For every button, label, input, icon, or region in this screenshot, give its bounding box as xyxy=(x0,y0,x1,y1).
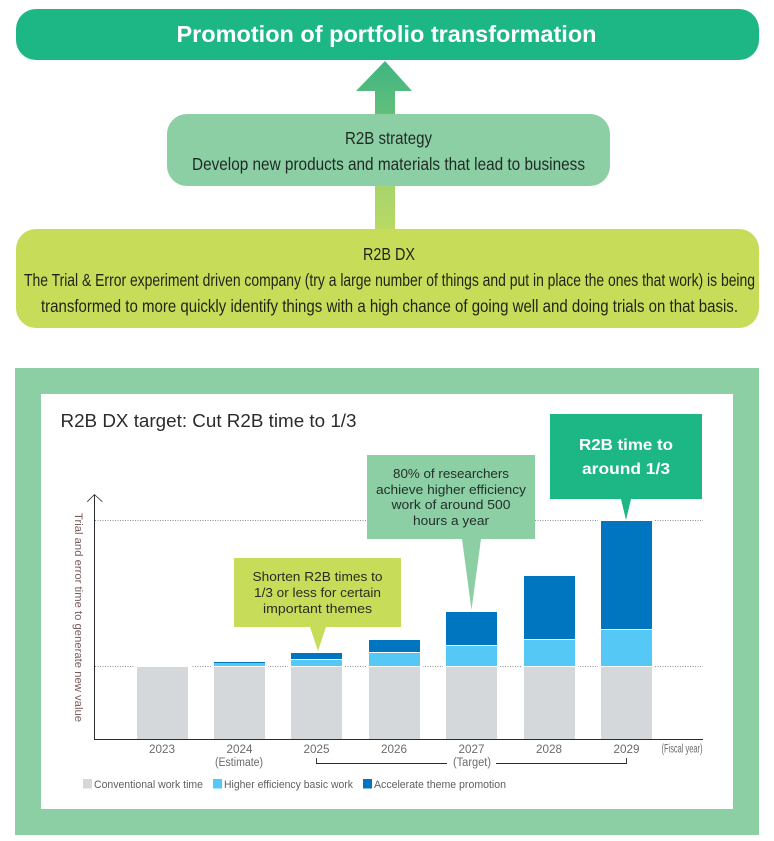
x-axis labels: (Estimate) xyxy=(215,757,263,769)
x-axis labels: 2024 xyxy=(226,744,253,756)
bars: higher efficiency basic work xyxy=(214,630,652,666)
x-axis labels: 2023 xyxy=(149,744,175,756)
x-axis labels: 2025 xyxy=(304,744,330,756)
chart title: R2B DX target: Cut R2B time to 1/3 xyxy=(60,411,356,431)
arrow: upward to portfolio transformation xyxy=(356,61,412,229)
x-axis labels: 2026 xyxy=(381,744,407,756)
heading: Promotion of portfolio transformation xyxy=(16,9,759,60)
panel: R2B strategy: R2B strategy xyxy=(345,128,432,148)
panel: R2B strategy xyxy=(167,114,610,186)
callout: shorten R2B times: Shorten R2B times to xyxy=(252,569,382,584)
callout: 80% of researchers xyxy=(367,455,535,610)
x-axis labels: (Target) xyxy=(453,757,491,769)
x-axis labels: (Fiscal year) xyxy=(662,744,703,756)
callout: shorten R2B times xyxy=(234,558,401,651)
callout: R2B time to around 1/3 xyxy=(550,414,702,520)
callout: shorten R2B times: 1/3 or less for certain xyxy=(254,585,381,600)
bar gaps xyxy=(134,518,655,672)
legend: Higher efficiency basic work xyxy=(224,779,353,791)
x-axis labels: 2027 xyxy=(458,744,484,756)
panel: R2B DX target chart xyxy=(15,368,759,835)
panel: R2B strategy: Develop new products and materials that lead to business xyxy=(192,154,585,174)
callout: 80% of researchers: work of around 500 xyxy=(390,497,510,512)
y-axis label: Trial and error time to generate new value xyxy=(72,513,84,722)
x-axis labels: 2028 xyxy=(536,744,562,756)
legend: Conventional work time xyxy=(94,779,203,791)
callout: R2B time to around 1/3: around 1/3 xyxy=(582,461,670,478)
reference lines xyxy=(95,520,703,666)
callout: 80% of researchers: 80% of researchers xyxy=(393,466,510,481)
bars: accelerate theme promotion xyxy=(214,521,652,664)
callout: shorten R2B times: important themes xyxy=(263,601,373,616)
callout: R2B time to around 1/3: R2B time to xyxy=(579,437,673,454)
legend: Accelerate theme promotion xyxy=(374,779,506,791)
heading: Promotion of portfolio transformation: Promotion of portfolio transformation xyxy=(176,21,596,47)
target bracket xyxy=(316,758,626,764)
panel: R2B DX: R2B DX xyxy=(363,244,415,264)
axes xyxy=(87,494,703,740)
x-axis labels xyxy=(149,744,703,769)
x-axis labels: 2029 xyxy=(614,744,640,756)
callout: 80% of researchers: hours a year xyxy=(413,513,490,528)
bars: conventional work time xyxy=(137,667,652,740)
panel: R2B DX xyxy=(16,229,759,328)
legend xyxy=(83,779,506,791)
callout: 80% of researchers: achieve higher efficiency xyxy=(376,482,527,497)
